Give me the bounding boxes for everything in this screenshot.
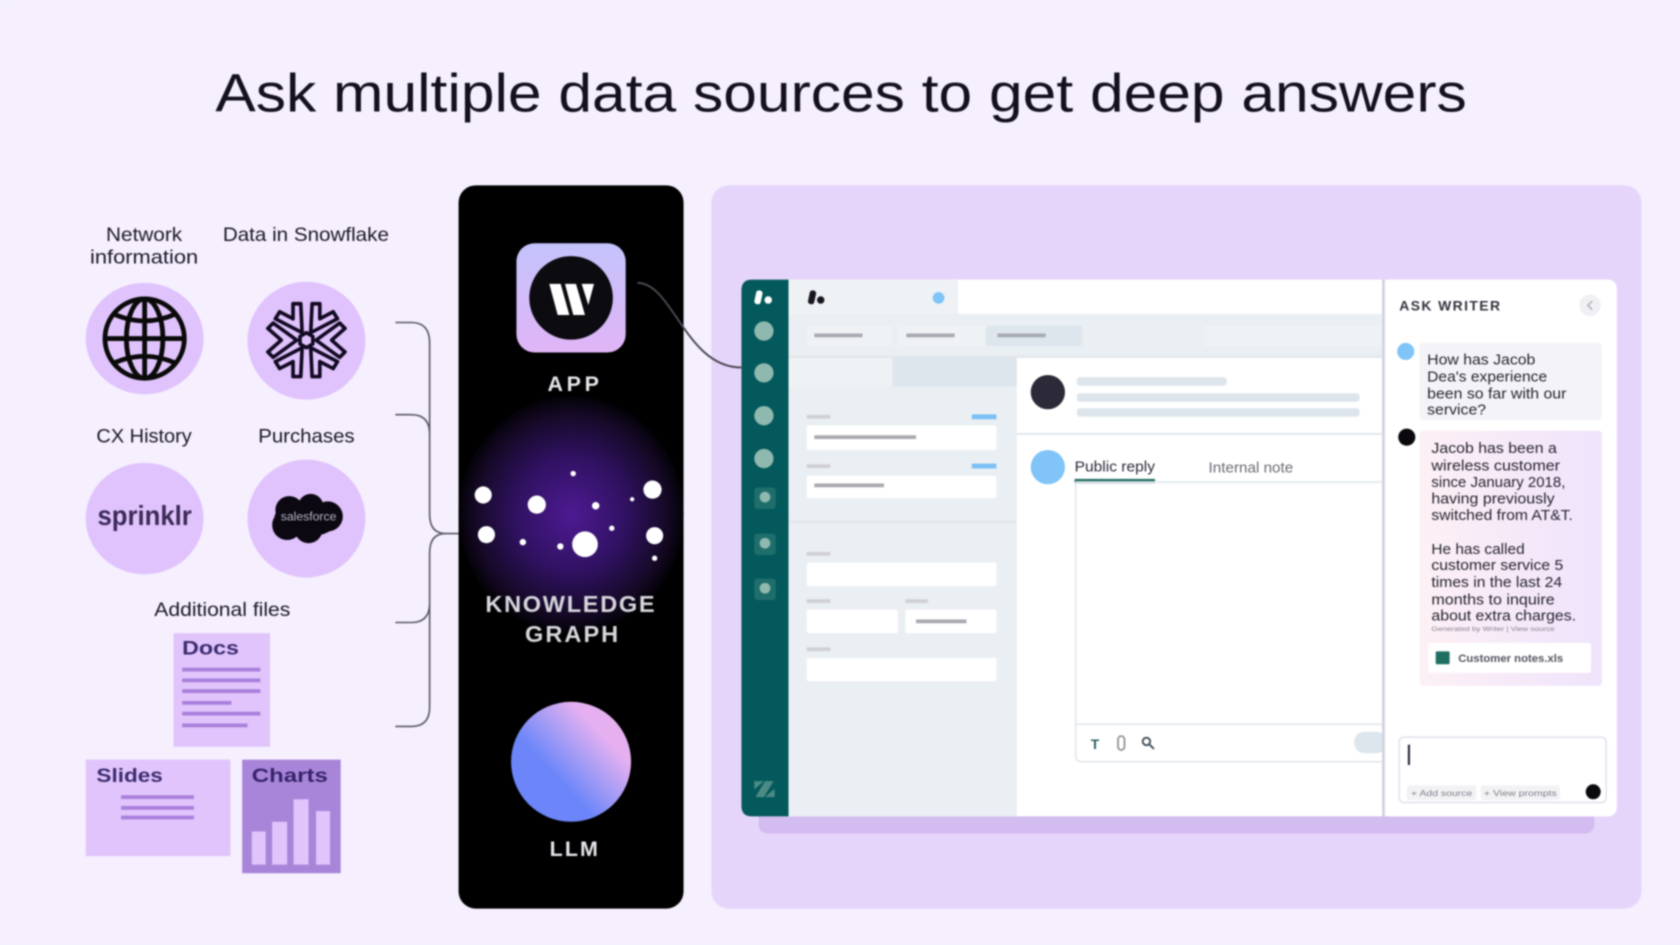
prompt input: + View prompts bbox=[1484, 788, 1557, 798]
label: network information: Network bbox=[106, 225, 183, 246]
icon: salesforce: salesforce bbox=[281, 511, 337, 524]
prompt input: + Add source bbox=[1411, 788, 1472, 798]
icon: writer app bbox=[516, 243, 626, 352]
icon: dark logo bbox=[807, 290, 824, 305]
label: knowledge graph: KNOWLEDGE bbox=[485, 591, 655, 617]
arrow: app to window bbox=[638, 283, 741, 368]
answer bubble: customer service 5 bbox=[1431, 558, 1563, 574]
source card: Customer notes.xls bbox=[1458, 653, 1563, 665]
icon: text format: T bbox=[1091, 736, 1100, 752]
question bubble bbox=[1420, 343, 1602, 420]
label: app: APP bbox=[548, 372, 599, 396]
window shadow bbox=[759, 793, 1594, 834]
panel: ask writer bbox=[1382, 280, 1617, 816]
teal sidebar bbox=[741, 280, 789, 816]
icon: slides file bbox=[86, 760, 230, 856]
question bubble: service? bbox=[1427, 403, 1486, 419]
question bubble: How has Jacob bbox=[1427, 352, 1535, 368]
label: llm: LLM bbox=[550, 837, 598, 861]
icon: sprinklr bbox=[86, 463, 204, 574]
icon: snowflake bbox=[248, 282, 365, 400]
heading: ask writer: ASK WRITER bbox=[1399, 298, 1500, 314]
label: network information bbox=[90, 225, 198, 269]
knowledge graph bbox=[459, 396, 684, 632]
icon: user dot bbox=[1397, 343, 1414, 360]
main conversation bbox=[1017, 375, 1386, 762]
tab: internal note: Internal note bbox=[1209, 460, 1293, 476]
panel: lilac background bbox=[711, 185, 1641, 909]
answer bubble: Jacob has been a bbox=[1431, 441, 1558, 457]
reply editor bbox=[1076, 482, 1386, 762]
answer bubble: wireless customer bbox=[1430, 458, 1560, 474]
left grey column bbox=[789, 280, 1382, 816]
icon: llm sphere bbox=[511, 702, 631, 822]
answer bubble: about extra charges. bbox=[1431, 608, 1576, 624]
icon: collapse button bbox=[1579, 295, 1601, 316]
icon: sprinklr: sprinklr bbox=[98, 500, 192, 531]
answer bubble: switched from AT&T. bbox=[1431, 508, 1573, 524]
icon: attachment bbox=[1118, 736, 1124, 750]
panel: data sources bbox=[86, 225, 389, 873]
toolbar pills bbox=[807, 326, 1382, 346]
icon: globe bbox=[86, 283, 204, 394]
answer bubble: having previously bbox=[1431, 492, 1555, 508]
label: network information: information bbox=[90, 248, 198, 269]
answer bubble: Generated by Writer | View source bbox=[1431, 626, 1555, 633]
icon: writer dot bbox=[1398, 429, 1415, 446]
icon: docs file: Docs bbox=[182, 639, 239, 660]
icon: zendesk mark bbox=[754, 781, 775, 797]
label: cx history: CX History bbox=[96, 427, 192, 448]
icon: docs file bbox=[174, 633, 270, 747]
panel: black pipeline bbox=[459, 185, 684, 909]
panel: app window bbox=[741, 280, 1617, 816]
label: knowledge graph: GRAPH bbox=[525, 621, 618, 647]
answer bubble: since January 2018, bbox=[1431, 475, 1565, 491]
icon: charts file bbox=[242, 760, 341, 873]
tab: public reply: Public reply bbox=[1075, 459, 1156, 475]
source card bbox=[1428, 643, 1591, 673]
label: data in snowflake: Data in Snowflake bbox=[223, 225, 389, 246]
bracket connector bbox=[395, 322, 459, 726]
icon: slides file: Slides bbox=[96, 766, 163, 787]
icon: charts file: Charts bbox=[252, 766, 328, 787]
form fields bbox=[807, 417, 996, 681]
label: additional files: Additional files bbox=[154, 600, 290, 621]
label: knowledge graph bbox=[485, 591, 655, 647]
question bubble: been so far with our bbox=[1427, 387, 1567, 403]
answer bubble bbox=[1420, 431, 1602, 686]
answer bubble: He has called bbox=[1431, 542, 1525, 558]
title: Ask multiple data sources to get deep answers bbox=[215, 64, 1467, 123]
icon: salesforce bbox=[248, 460, 365, 578]
question bubble: Dea's experience bbox=[1427, 369, 1547, 385]
icon: search bbox=[1143, 738, 1154, 749]
label: purchases: Purchases bbox=[258, 427, 355, 448]
answer bubble: times in the last 24 bbox=[1431, 575, 1562, 591]
answer bubble: months to inquire bbox=[1431, 592, 1555, 608]
prompt input bbox=[1399, 737, 1606, 802]
